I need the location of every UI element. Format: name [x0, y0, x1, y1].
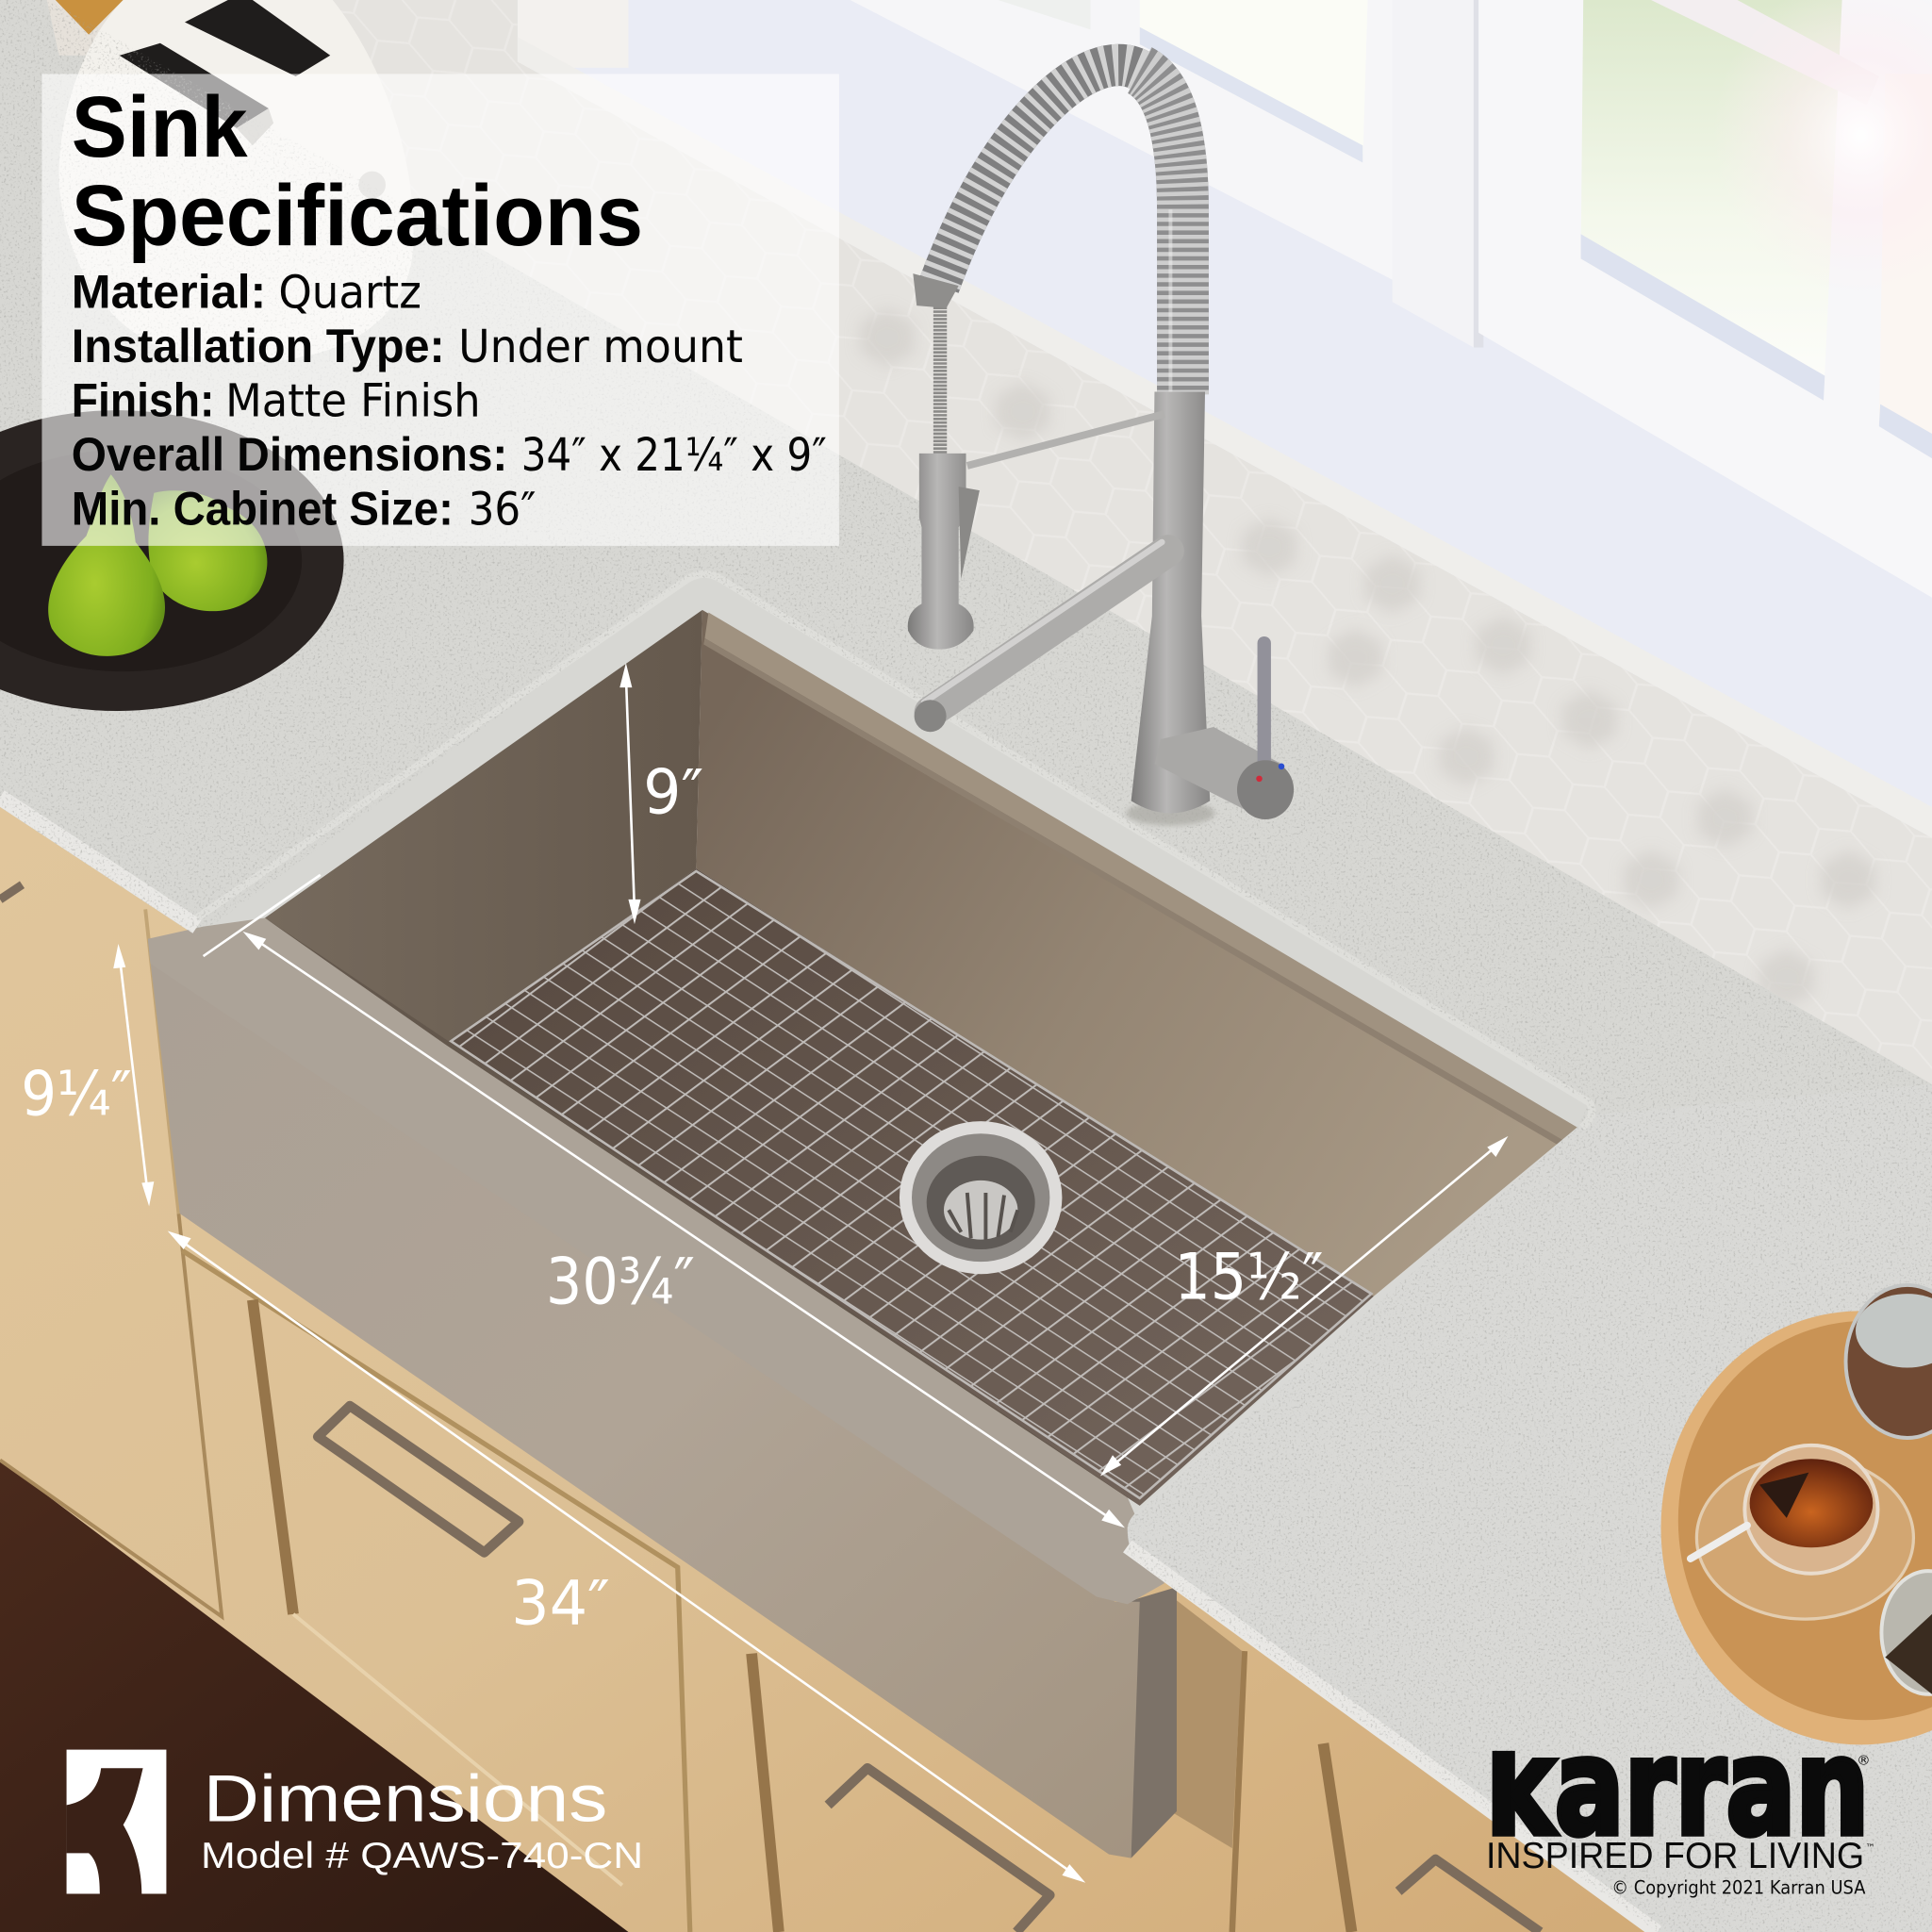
window post: [1393, 0, 1478, 348]
spec: finish: Matte Finish: [225, 375, 481, 428]
countertop right piece: [1128, 1084, 1932, 1932]
faucet spout: [931, 551, 1168, 712]
wire grid: [451, 871, 1371, 1498]
faucet shadow: [1126, 801, 1214, 826]
spec: minimum cabinet size: Min. Cabinet Size:: [72, 483, 454, 536]
handle lever: [1259, 643, 1269, 764]
copyright line: © Copyright 2021 Karran USA: [1611, 1876, 1866, 1898]
teapot: [1846, 1285, 1932, 1438]
logo tagline: INSPIRED FOR LIVING: [1486, 1836, 1864, 1876]
spec: installation type: Installation Type:: [72, 320, 445, 372]
right window glass: [1581, 0, 1842, 401]
basin back wall: [696, 610, 1577, 1296]
dimension: basin width 15 1/2 inches: [1100, 1136, 1508, 1476]
left window frame: [850, 0, 1395, 281]
sink: [148, 610, 1577, 1858]
spring end cap: [913, 273, 959, 308]
dimension: basin width 15 1/2 inches: 15½″: [1174, 1240, 1323, 1314]
tea glass: [1744, 1445, 1878, 1574]
spoon: [1691, 1526, 1747, 1559]
dimensions title: Dimensions: [204, 1760, 607, 1835]
plate with pears: [0, 410, 344, 711]
window group: [850, 0, 1932, 598]
backsplash: [333, 0, 1932, 1084]
dimension: sink depth 9 inches: [619, 663, 703, 924]
panel heading: [72, 79, 643, 264]
faucet: [908, 65, 1294, 826]
trademark mark: ™: [1865, 1842, 1875, 1854]
wall and window sill: [518, 0, 1932, 850]
sun glare: [1712, 0, 1932, 296]
faucet body: [1131, 392, 1210, 813]
spec: minimum cabinet size: 36″: [469, 484, 536, 537]
spec: finish: [72, 374, 481, 428]
spec: finish: Finish:: [72, 374, 214, 427]
cabinet details: [0, 884, 1540, 1932]
apron front face: [150, 961, 1140, 1858]
dimension: sink depth 9 inches: 9″: [643, 756, 703, 828]
backsplash top lip: [518, 37, 1932, 838]
countertop edges: [0, 574, 1658, 1932]
left window glass: [1140, 0, 1368, 162]
drain: [900, 1121, 1062, 1274]
faucet spring: [939, 65, 1182, 394]
dimension: basin length 30 3/4 inches: 30¾″: [546, 1246, 695, 1320]
panel background: [41, 74, 839, 546]
model number: Model # QAWS-740-CN: [201, 1836, 643, 1876]
panel heading: Sink: [72, 79, 248, 175]
cabinet handle two: [828, 1768, 1049, 1932]
karran logo: [1489, 1750, 1873, 1897]
dimensions title: [201, 1760, 643, 1876]
tray with tea glasses: [1661, 1285, 1932, 1744]
apron side: [1128, 1587, 1177, 1858]
registered mark: ®: [1857, 1753, 1871, 1768]
spec: installation type: Under mount: [458, 321, 743, 373]
dimension: apron height 9 1/4 inches: 9¼″: [21, 1059, 132, 1131]
cabinet handle one: [318, 1406, 519, 1553]
lower cabinets base: [0, 807, 1658, 1932]
dimension: apron height 9 1/4 inches: [21, 944, 154, 1206]
dimension: overall length 34 inches: [168, 1230, 1085, 1883]
icon: karran R mark: [67, 1750, 166, 1893]
right window frame: [1478, 0, 1932, 598]
specifications panel: [41, 74, 839, 546]
pear back: [148, 490, 267, 611]
upper left cabinet piece: [518, 0, 628, 68]
basin left wall: [265, 610, 702, 1045]
basin front inner wall: [265, 918, 1140, 1506]
handle base: [1154, 727, 1281, 816]
apron top rim: [148, 918, 1164, 1604]
cabinet handle three: [1398, 1859, 1540, 1932]
pear front: [48, 474, 165, 656]
spec: overall dimensions: [72, 428, 827, 482]
basin back rim steps: [704, 612, 1577, 1140]
spray head: [908, 454, 974, 650]
panel heading: Specifications: [72, 168, 643, 264]
spec: material: [72, 266, 421, 320]
dimension: overall length 34 inches: 34″: [511, 1567, 610, 1639]
spec: installation type: [72, 320, 743, 373]
spec: overall dimensions: Overall Dimensions:: [72, 428, 507, 481]
saucer: [1696, 1457, 1913, 1619]
toaster and utensil holder: [47, 0, 413, 362]
cabinet shaded piece right of apron: [1170, 1595, 1242, 1848]
spec: material: Material:: [72, 266, 266, 319]
connector rod: [967, 414, 1164, 466]
pull-down hose: [935, 296, 946, 458]
dimension: basin length 30 3/4 inches: [204, 875, 1125, 1527]
basin floor: [446, 868, 1374, 1506]
handle cap: [1237, 760, 1294, 819]
spec: overall dimensions: 34″ x 21¼″ x 9″: [521, 429, 827, 482]
second glass: [1881, 1571, 1932, 1694]
spec: material: Quartz: [278, 267, 421, 320]
wooden tray: [1661, 1311, 1932, 1744]
floor: [0, 1461, 628, 1932]
